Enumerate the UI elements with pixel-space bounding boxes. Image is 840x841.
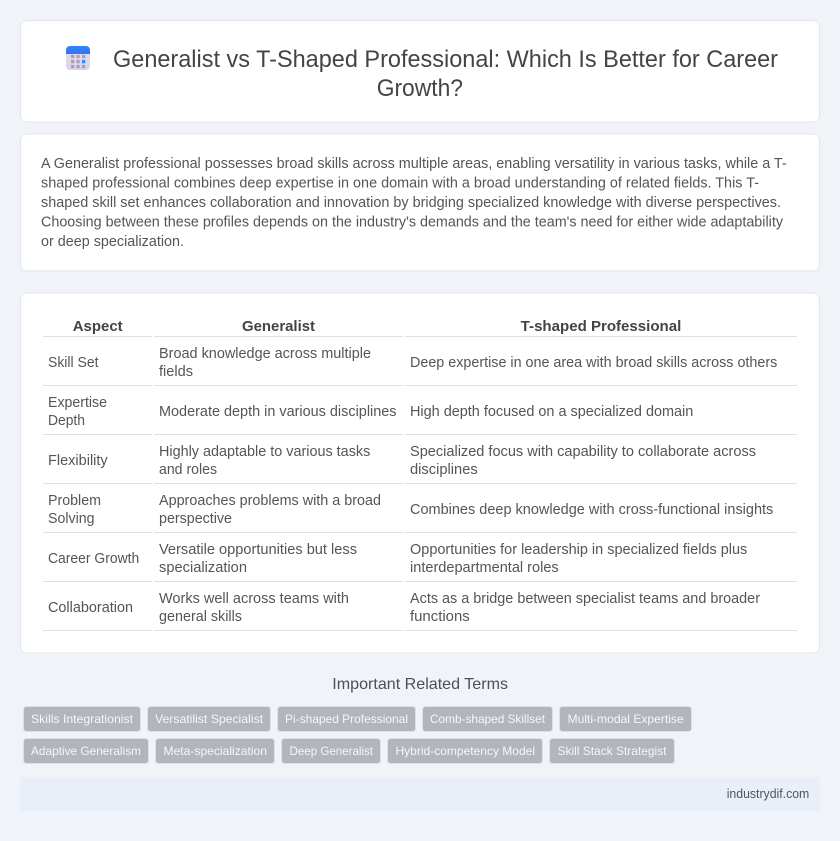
row: Skill Set: [43, 346, 797, 386]
text block: description paragraph: Choosing between these profiles depends on the industry's demands and the team's need for either wide adaptability: [41, 214, 784, 230]
row: Collaboration: Collaboration: [48, 600, 133, 616]
row: Expertise Depth: High depth focused on a specialized domain: [410, 404, 693, 420]
tag: Adaptive Generalism: [24, 738, 148, 764]
row: Collaboration: functions: [410, 609, 470, 625]
panel: comparison table: [20, 293, 820, 653]
tag: Skill Stack Strategist: [550, 738, 674, 764]
row: Expertise Depth: Expertise: [48, 395, 107, 411]
row: Career Growth: Career Growth: [48, 551, 139, 567]
heading: related terms: Important Related Terms: [332, 676, 508, 693]
row: Flexibility: Highly adaptable to various tasks: [159, 444, 370, 460]
footer: industrydif.com: [727, 786, 809, 801]
table header row: T-shaped Professional: [521, 318, 681, 335]
text block: description paragraph: shaped professional combines deep expertise in one domain with a broad understanding of related fields. This T-: [41, 176, 759, 192]
tag: Skills Integrationist: Skills Integrationist: [31, 712, 134, 726]
tag: Versatilist Specialist: Versatilist Specialist: [155, 712, 264, 726]
row: Flexibility: Specialized focus with capability to collaborate across: [410, 444, 756, 460]
tag: Comb-shaped Skillset: [422, 706, 552, 732]
icon: calendar: [66, 46, 90, 70]
row: Skill Set: fields: [159, 364, 193, 380]
row: Collaboration: [43, 591, 797, 630]
tag list: related terms: [24, 706, 692, 764]
tag: Pi-shaped Professional: [278, 706, 416, 732]
row: Flexibility: disciplines: [410, 462, 478, 478]
tag: Deep Generalist: [282, 738, 380, 764]
table header row: Generalist: [242, 318, 315, 335]
tag: Skill Stack Strategist: Skill Stack Strategist: [558, 744, 667, 758]
title: Generalist vs T-Shaped Professional: Which Is Better for Career: [113, 46, 778, 73]
row: Career Growth: [43, 542, 797, 582]
tag: Multi-modal Expertise: [560, 706, 692, 732]
text block: description paragraph: [41, 156, 787, 250]
row: Career Growth: Versatile opportunities but less: [159, 542, 357, 558]
row: Problem Solving: Solving: [48, 511, 94, 527]
tag: Meta-specialization: Meta-specialization: [164, 744, 267, 758]
tag: Comb-shaped Skillset: Comb-shaped Skillset: [430, 712, 546, 726]
tag: Skills Integrationist: [24, 706, 140, 732]
row: Problem Solving: perspective: [159, 511, 232, 527]
row: Collaboration: Acts as a bridge between specialist teams and broader: [410, 591, 760, 607]
tag: Meta-specialization: [156, 738, 274, 764]
row: Expertise Depth: [43, 395, 797, 434]
tag: Adaptive Generalism: Adaptive Generalism: [31, 744, 141, 758]
table header row: [43, 318, 797, 336]
tag: Deep Generalist: Deep Generalist: [290, 744, 374, 758]
tag: Pi-shaped Professional: Pi-shaped Professional: [285, 712, 408, 726]
row: Flexibility: [43, 444, 797, 484]
tag: Versatilist Specialist: [148, 706, 270, 732]
text block: description paragraph: A Generalist professional possesses broad skills across multiple areas, enabling versatility in various tasks, while a T-: [41, 156, 787, 172]
row: Collaboration: general skills: [159, 609, 242, 625]
row: Skill Set: Deep expertise in one area with broad skills across others: [410, 355, 777, 371]
panel: header: [20, 20, 820, 122]
row: Expertise Depth: Depth: [48, 413, 85, 429]
row: Career Growth: interdepartmental roles: [410, 560, 559, 576]
table header row: Aspect: [73, 318, 123, 335]
row: Skill Set: Broad knowledge across multiple: [159, 346, 371, 362]
row: Career Growth: Opportunities for leadership in specialized fields plus: [410, 542, 747, 558]
tag: Hybrid-competency Model: Hybrid-competency Model: [396, 744, 535, 758]
footer: [20, 777, 820, 811]
text block: description paragraph: or deep specialization.: [41, 234, 184, 250]
row: Problem Solving: [43, 493, 797, 532]
row: Problem Solving: Approaches problems with a broad: [159, 493, 381, 509]
row: Expertise Depth: Moderate depth in various disciplines: [159, 404, 396, 420]
row: Flexibility: and roles: [159, 462, 217, 478]
tag: Hybrid-competency Model: [388, 738, 542, 764]
row: Problem Solving: Problem: [48, 493, 101, 509]
text block: description paragraph: shaped skill set enhances collaboration and innovation by bridging specialized knowledge with diverse perspectives.: [41, 195, 781, 211]
row: Flexibility: Flexibility: [48, 453, 108, 469]
row: Collaboration: Works well across teams with: [159, 591, 349, 607]
row: Problem Solving: Combines deep knowledge with cross-functional insights: [410, 502, 773, 518]
row: Skill Set: Skill Set: [48, 355, 98, 371]
panel: description: [20, 134, 820, 271]
title: [113, 46, 778, 102]
row: Career Growth: specialization: [159, 560, 247, 576]
title: Growth?: [377, 75, 463, 102]
tag: Multi-modal Expertise: Multi-modal Expertise: [568, 712, 684, 726]
